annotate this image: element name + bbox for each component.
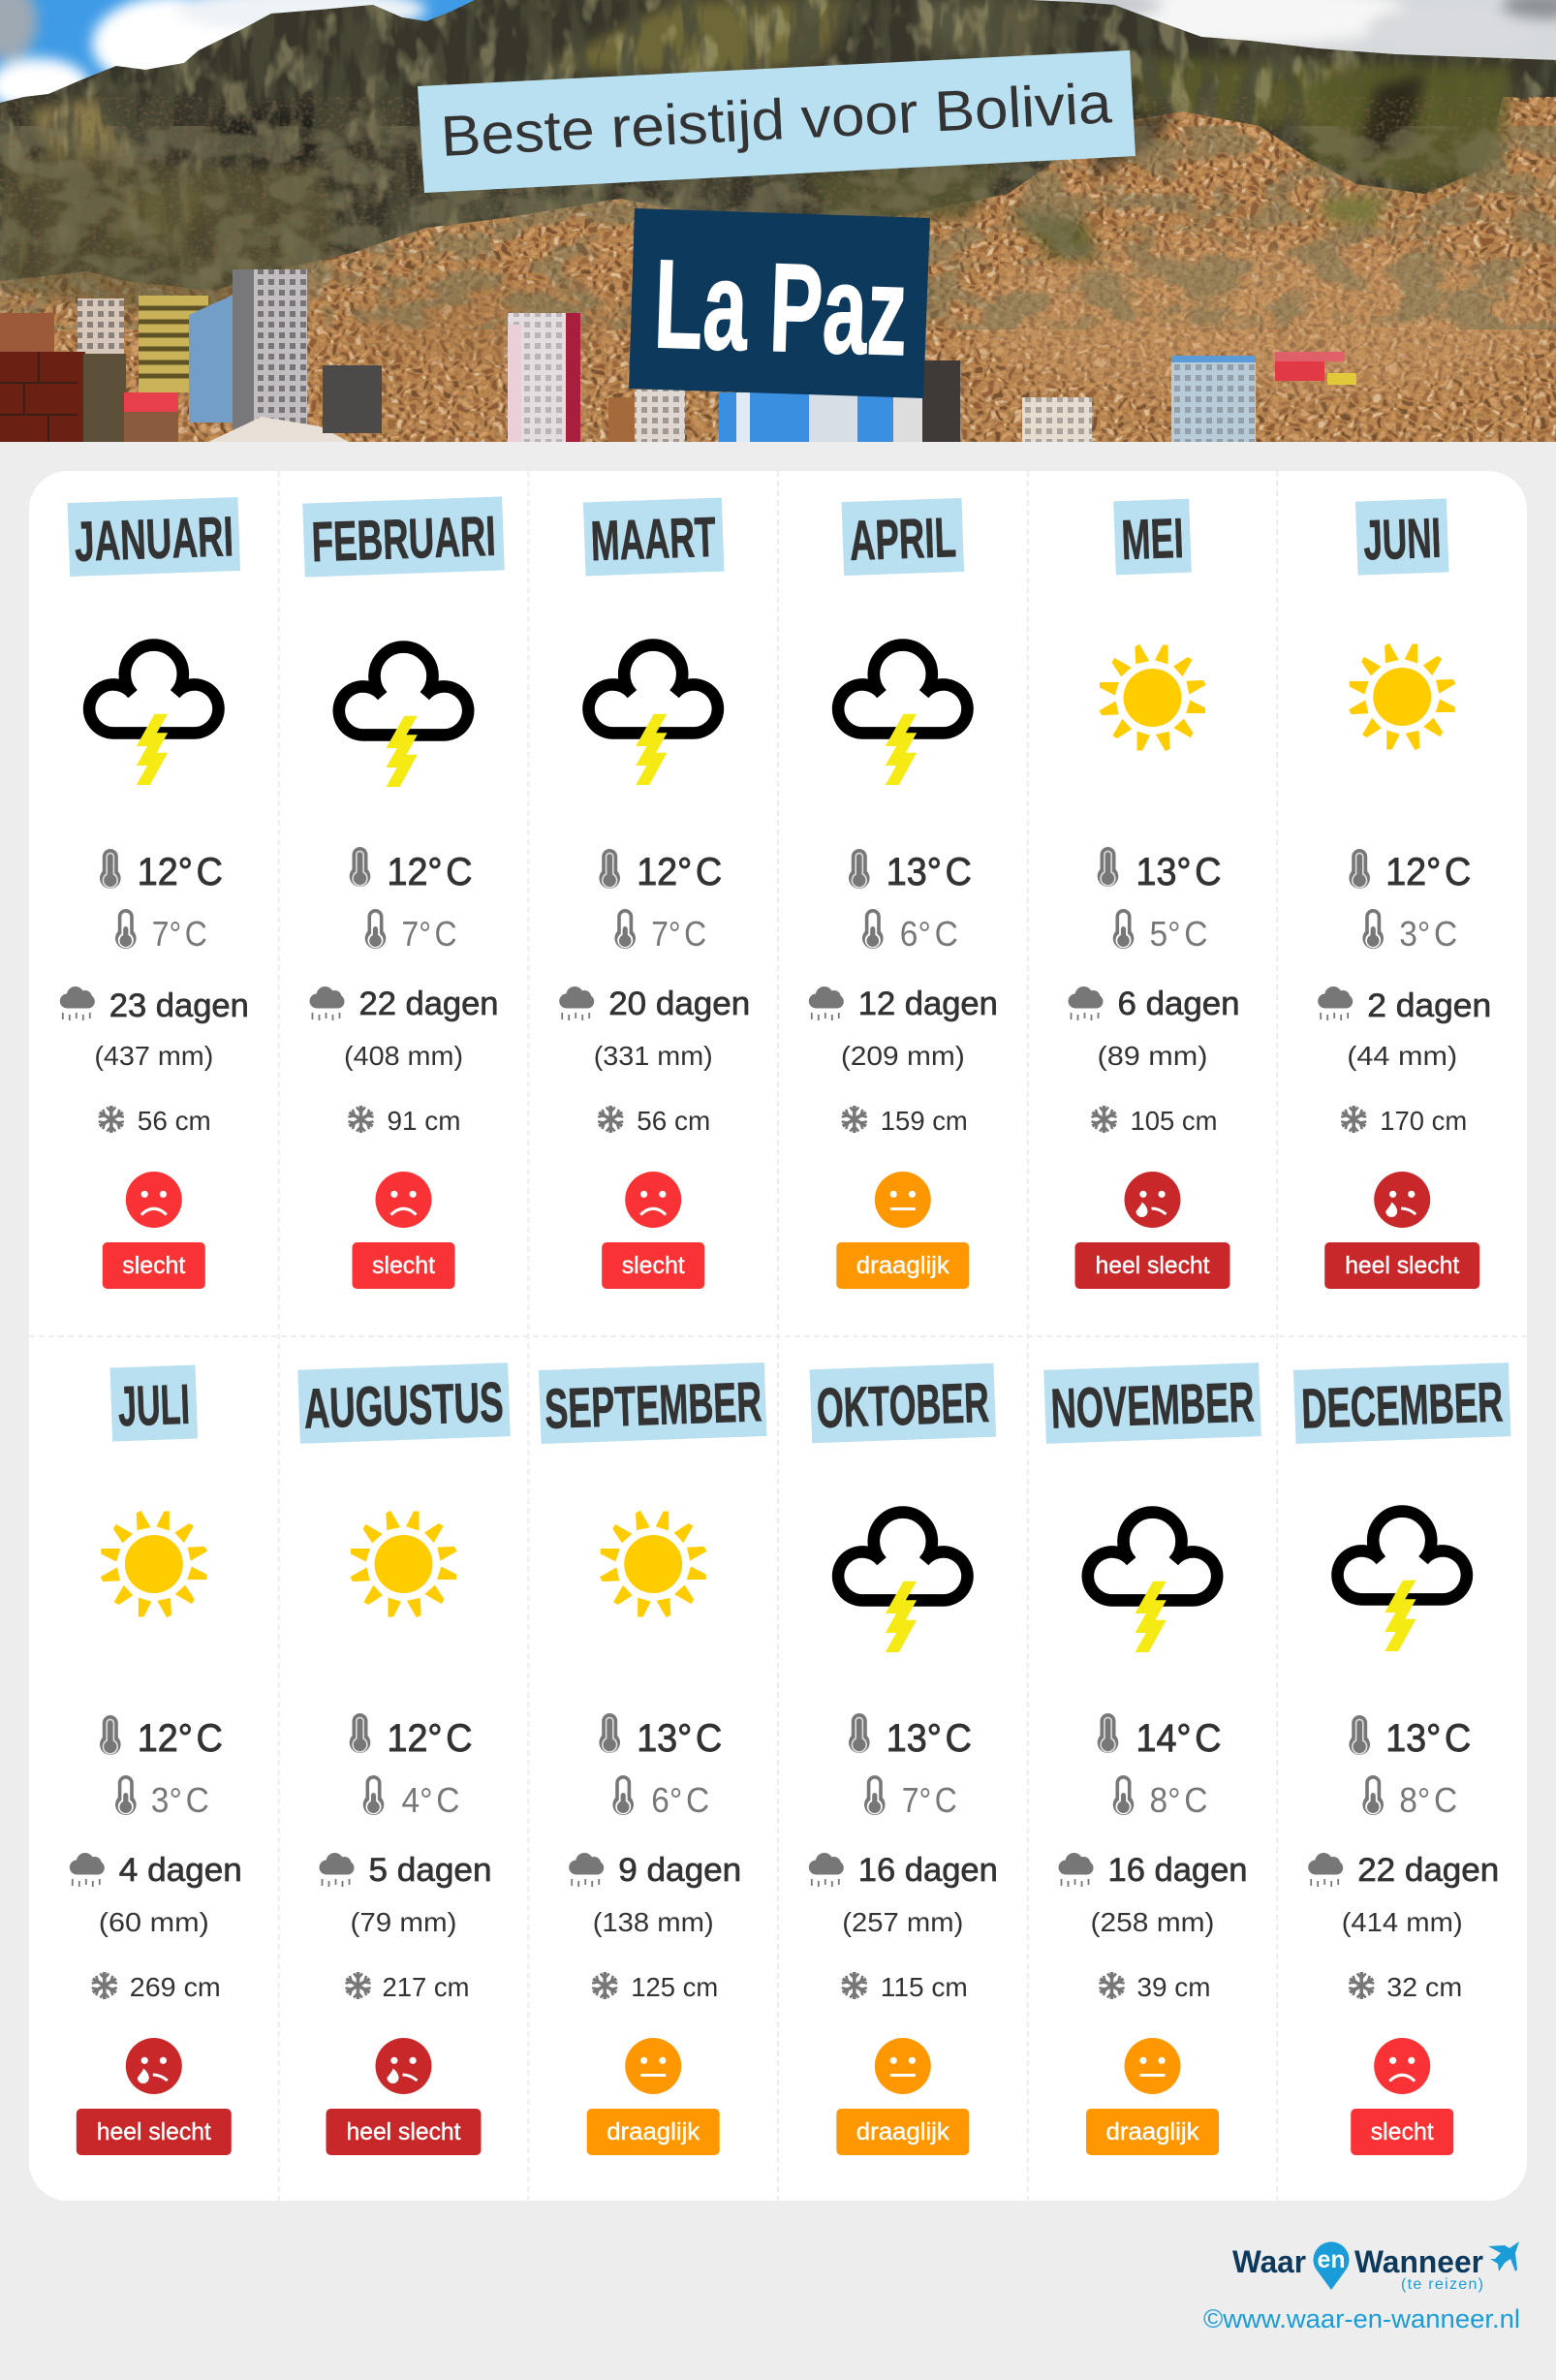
rating badge: slecht: [372, 1252, 435, 1279]
snow depth: [591, 1972, 718, 2002]
rain days: 22 dagen: [1357, 1852, 1499, 1889]
snow depth: 115 cm: [881, 1972, 968, 2002]
month: mei: [1068, 499, 1240, 1289]
rating face: [1124, 2038, 1180, 2094]
max temperature: 13°C: [887, 851, 972, 893]
min temperature: [612, 1775, 709, 1820]
rainfall: (414 mm): [1342, 1907, 1463, 1937]
header photo: La Paz city and mountain: [0, 0, 1556, 455]
rating badge: heel slecht: [97, 2118, 211, 2145]
rating badge: [353, 1242, 455, 1289]
month label: [539, 1362, 766, 1444]
month label: [302, 496, 505, 578]
min temperature: 7°C: [902, 1780, 957, 1820]
icon: map pin: [1314, 2241, 1349, 2290]
max temperature: [849, 849, 972, 893]
rain days: 16 dagen: [858, 1852, 998, 1889]
snow depth: 269 cm: [130, 1972, 221, 2002]
min temperature: 6°C: [651, 1780, 709, 1820]
min temperature: 7°C: [152, 914, 207, 954]
min temperature: [862, 909, 958, 954]
rain days: 2 dagen: [1367, 987, 1491, 1024]
rating badge: slecht: [122, 1252, 185, 1279]
rain days: 12 dagen: [858, 986, 998, 1022]
icon: sun: [101, 1511, 207, 1617]
month label: OKTOBER: [816, 1371, 990, 1440]
rating badge: [1086, 2109, 1219, 2155]
max temperature: 12°C: [637, 851, 722, 893]
rain days: [569, 1852, 741, 1889]
month label: [842, 498, 964, 576]
snow depth: 159 cm: [881, 1106, 968, 1136]
month: juli: [70, 1364, 242, 2155]
month: september: [539, 1362, 766, 2155]
snow depth: [347, 1106, 461, 1136]
max temperature: 14°C: [1136, 1717, 1221, 1760]
month: juni: [1318, 498, 1491, 1289]
rating face: [625, 2038, 681, 2094]
rating badge: [326, 2109, 481, 2155]
month label: SEPTEMBER: [544, 1370, 762, 1441]
month label: [1043, 1362, 1261, 1444]
rain days: [70, 1852, 242, 1889]
rating badge: [587, 2109, 720, 2155]
month: januari: [60, 497, 249, 1289]
rating face: [376, 2038, 432, 2094]
min temperature: 8°C: [1149, 1780, 1207, 1820]
rainfall: (209 mm): [841, 1041, 965, 1071]
icon: storm: [589, 645, 718, 785]
max temperature: 12°C: [138, 1717, 223, 1760]
rain days: [1068, 986, 1240, 1022]
rain days: 23 dagen: [109, 987, 249, 1024]
max temperature: 12°C: [1385, 851, 1471, 893]
min temperature: 7°C: [401, 914, 457, 954]
rating badge: slecht: [1371, 2118, 1434, 2145]
max temperature: 13°C: [1385, 1717, 1471, 1760]
max temperature: 13°C: [887, 1717, 972, 1760]
max temperature: 12°C: [388, 1717, 473, 1760]
rating badge: [836, 2109, 969, 2155]
rainfall: (437 mm): [94, 1041, 213, 1071]
snow depth: [90, 1972, 221, 2002]
icon: sun: [600, 1511, 706, 1617]
max temperature: 13°C: [1136, 851, 1221, 893]
min temperature: [864, 1775, 957, 1820]
snow depth: [840, 1106, 968, 1136]
rating badge: draaglijk: [856, 2118, 949, 2145]
title: Beste reistijd voor Bolivia: [439, 71, 1113, 169]
min temperature: 4°C: [401, 1780, 459, 1820]
wordmark: Wanneer: [1354, 2244, 1483, 2279]
max temperature: [849, 1713, 972, 1760]
city name: La Paz: [652, 233, 910, 382]
rain days: 5 dagen: [368, 1852, 492, 1889]
min temperature: 5°C: [1149, 914, 1207, 954]
rain days: 4 dagen: [119, 1852, 242, 1889]
snow depth: [1090, 1106, 1217, 1136]
month label: [297, 1362, 511, 1444]
rating face: [126, 2038, 182, 2094]
month label: JANUARI: [74, 505, 234, 574]
rating badge: [1351, 2109, 1453, 2155]
min temperature: 7°C: [651, 914, 706, 954]
icon: plane: [1488, 2241, 1519, 2271]
month label: NOVEMBER: [1050, 1370, 1256, 1441]
snow depth: [597, 1106, 710, 1136]
min temperature: [363, 1775, 459, 1820]
icon: storm: [1338, 1512, 1467, 1651]
logo: Waar en Wanneer: [1232, 2241, 1519, 2293]
website credit: ©www.waar-en-wanneer.nl: [1203, 2304, 1520, 2333]
max temperature: [1098, 847, 1221, 893]
rain days: [320, 1852, 492, 1889]
rainfall: (138 mm): [593, 1907, 714, 1937]
rating badge: heel slecht: [1345, 1252, 1459, 1279]
min temperature: 8°C: [1399, 1780, 1457, 1820]
snow depth: [1098, 1972, 1211, 2002]
rating badge: [602, 1242, 704, 1289]
min temperature: [115, 909, 207, 954]
min temperature: [365, 909, 457, 954]
rain days: 6 dagen: [1118, 986, 1240, 1022]
rating badge: draaglijk: [1106, 2118, 1199, 2145]
month: augustus: [297, 1362, 511, 2155]
min temperature: [614, 909, 706, 954]
snow depth: [840, 1972, 968, 2002]
rating badge: [1324, 1242, 1479, 1289]
snow depth: 125 cm: [631, 1972, 718, 2002]
title banner: [418, 50, 1136, 193]
rating badge: heel slecht: [1095, 1252, 1210, 1279]
min temperature: [1362, 1775, 1457, 1820]
month label: AUGUSTUS: [303, 1370, 505, 1441]
rain days: [1318, 986, 1491, 1024]
max temperature: 13°C: [637, 1717, 722, 1760]
max temperature: [1098, 1713, 1221, 1760]
rainfall: (60 mm): [99, 1907, 209, 1937]
rainfall: (79 mm): [351, 1907, 457, 1937]
rain days: 22 dagen: [358, 986, 498, 1022]
month label: JULI: [117, 1373, 191, 1438]
rating face: [1374, 1172, 1430, 1228]
rainfall: (89 mm): [1097, 1041, 1207, 1071]
rating badge: slecht: [622, 1252, 685, 1279]
max temperature: [350, 847, 473, 893]
rating face: [875, 1172, 931, 1228]
rating badge: [836, 1242, 969, 1289]
max temperature: 12°C: [138, 851, 223, 893]
month label: [1355, 498, 1448, 576]
city banner: [629, 208, 930, 398]
min temperature: 6°C: [900, 914, 958, 954]
snow depth: [1340, 1106, 1467, 1136]
max temperature: [350, 1713, 473, 1760]
rainfall: (257 mm): [842, 1907, 963, 1937]
month label: APRIL: [849, 506, 957, 573]
max temperature: [599, 849, 722, 893]
rating face: [1124, 1172, 1180, 1228]
rainfall: (258 mm): [1091, 1907, 1214, 1937]
month label: [68, 497, 240, 577]
month label: [583, 498, 724, 576]
min temperature: 3°C: [151, 1780, 209, 1820]
snow depth: 170 cm: [1380, 1106, 1467, 1136]
snow depth: 56 cm: [138, 1106, 211, 1136]
snow depth: 91 cm: [388, 1106, 461, 1136]
rating badge: heel slecht: [347, 2118, 461, 2145]
month label: MAART: [590, 506, 717, 573]
rain days: 20 dagen: [608, 986, 750, 1022]
month: maart: [559, 498, 750, 1289]
month: februari: [302, 496, 505, 1289]
min temperature: [1362, 909, 1457, 954]
month: december: [1293, 1362, 1510, 2155]
month label: FEBRUARI: [311, 505, 497, 574]
month: november: [1043, 1362, 1261, 2155]
rating badge: [77, 2109, 232, 2155]
rating face: [875, 2038, 931, 2094]
rainfall: (44 mm): [1347, 1041, 1457, 1071]
month: april: [809, 498, 998, 1289]
rating badge: [103, 1242, 205, 1289]
icon: storm: [89, 645, 218, 785]
icon: storm: [838, 645, 967, 785]
icon: storm: [838, 1513, 967, 1652]
max temperature: [100, 1715, 223, 1760]
rain days: 16 dagen: [1108, 1852, 1248, 1889]
icon: map pin: en: [1318, 2246, 1345, 2273]
rating face: [126, 1172, 182, 1228]
snow depth: [97, 1106, 211, 1136]
rating badge: [1075, 1242, 1230, 1289]
rating face: [376, 1172, 432, 1228]
month label: [110, 1364, 198, 1442]
min temperature: 3°C: [1399, 914, 1457, 954]
month label: JUNI: [1362, 507, 1442, 572]
snow depth: 105 cm: [1130, 1106, 1217, 1136]
icon: storm: [339, 647, 468, 787]
snow depth: [1348, 1972, 1462, 2002]
max temperature: [1349, 849, 1471, 893]
snow depth: 56 cm: [637, 1106, 710, 1136]
min temperature: [1113, 909, 1207, 954]
icon: storm: [1088, 1513, 1217, 1652]
icon: sun: [350, 1511, 457, 1617]
rating badge: draaglijk: [856, 1252, 949, 1279]
rating badge: draaglijk: [607, 2118, 700, 2145]
rating face: [625, 1172, 681, 1228]
max temperature: [1349, 1715, 1471, 1760]
month label: [1113, 499, 1192, 575]
icon: sun: [1349, 643, 1455, 750]
snow depth: 32 cm: [1386, 1972, 1462, 2002]
rain days: 9 dagen: [618, 1852, 741, 1889]
max temperature: 12°C: [388, 851, 473, 893]
logo: Waar en Wanneer: Waar: [1232, 2244, 1306, 2279]
rainfall: (408 mm): [344, 1041, 463, 1071]
panel: climate card: [29, 471, 1527, 2201]
max temperature: [100, 849, 223, 893]
snow depth: [344, 1972, 469, 2002]
min temperature: [1113, 1775, 1207, 1820]
snow depth: 39 cm: [1137, 1972, 1211, 2002]
rating face: [1374, 2038, 1430, 2094]
month: oktober: [809, 1363, 998, 2155]
month label: [810, 1363, 996, 1443]
icon: sun: [1099, 644, 1206, 751]
min temperature: [115, 1775, 209, 1820]
month label: MEI: [1120, 507, 1185, 572]
rainfall: (331 mm): [594, 1041, 713, 1071]
tagline: (te reizen): [1401, 2276, 1483, 2293]
max temperature: [599, 1713, 722, 1760]
snow depth: 217 cm: [382, 1972, 469, 2002]
